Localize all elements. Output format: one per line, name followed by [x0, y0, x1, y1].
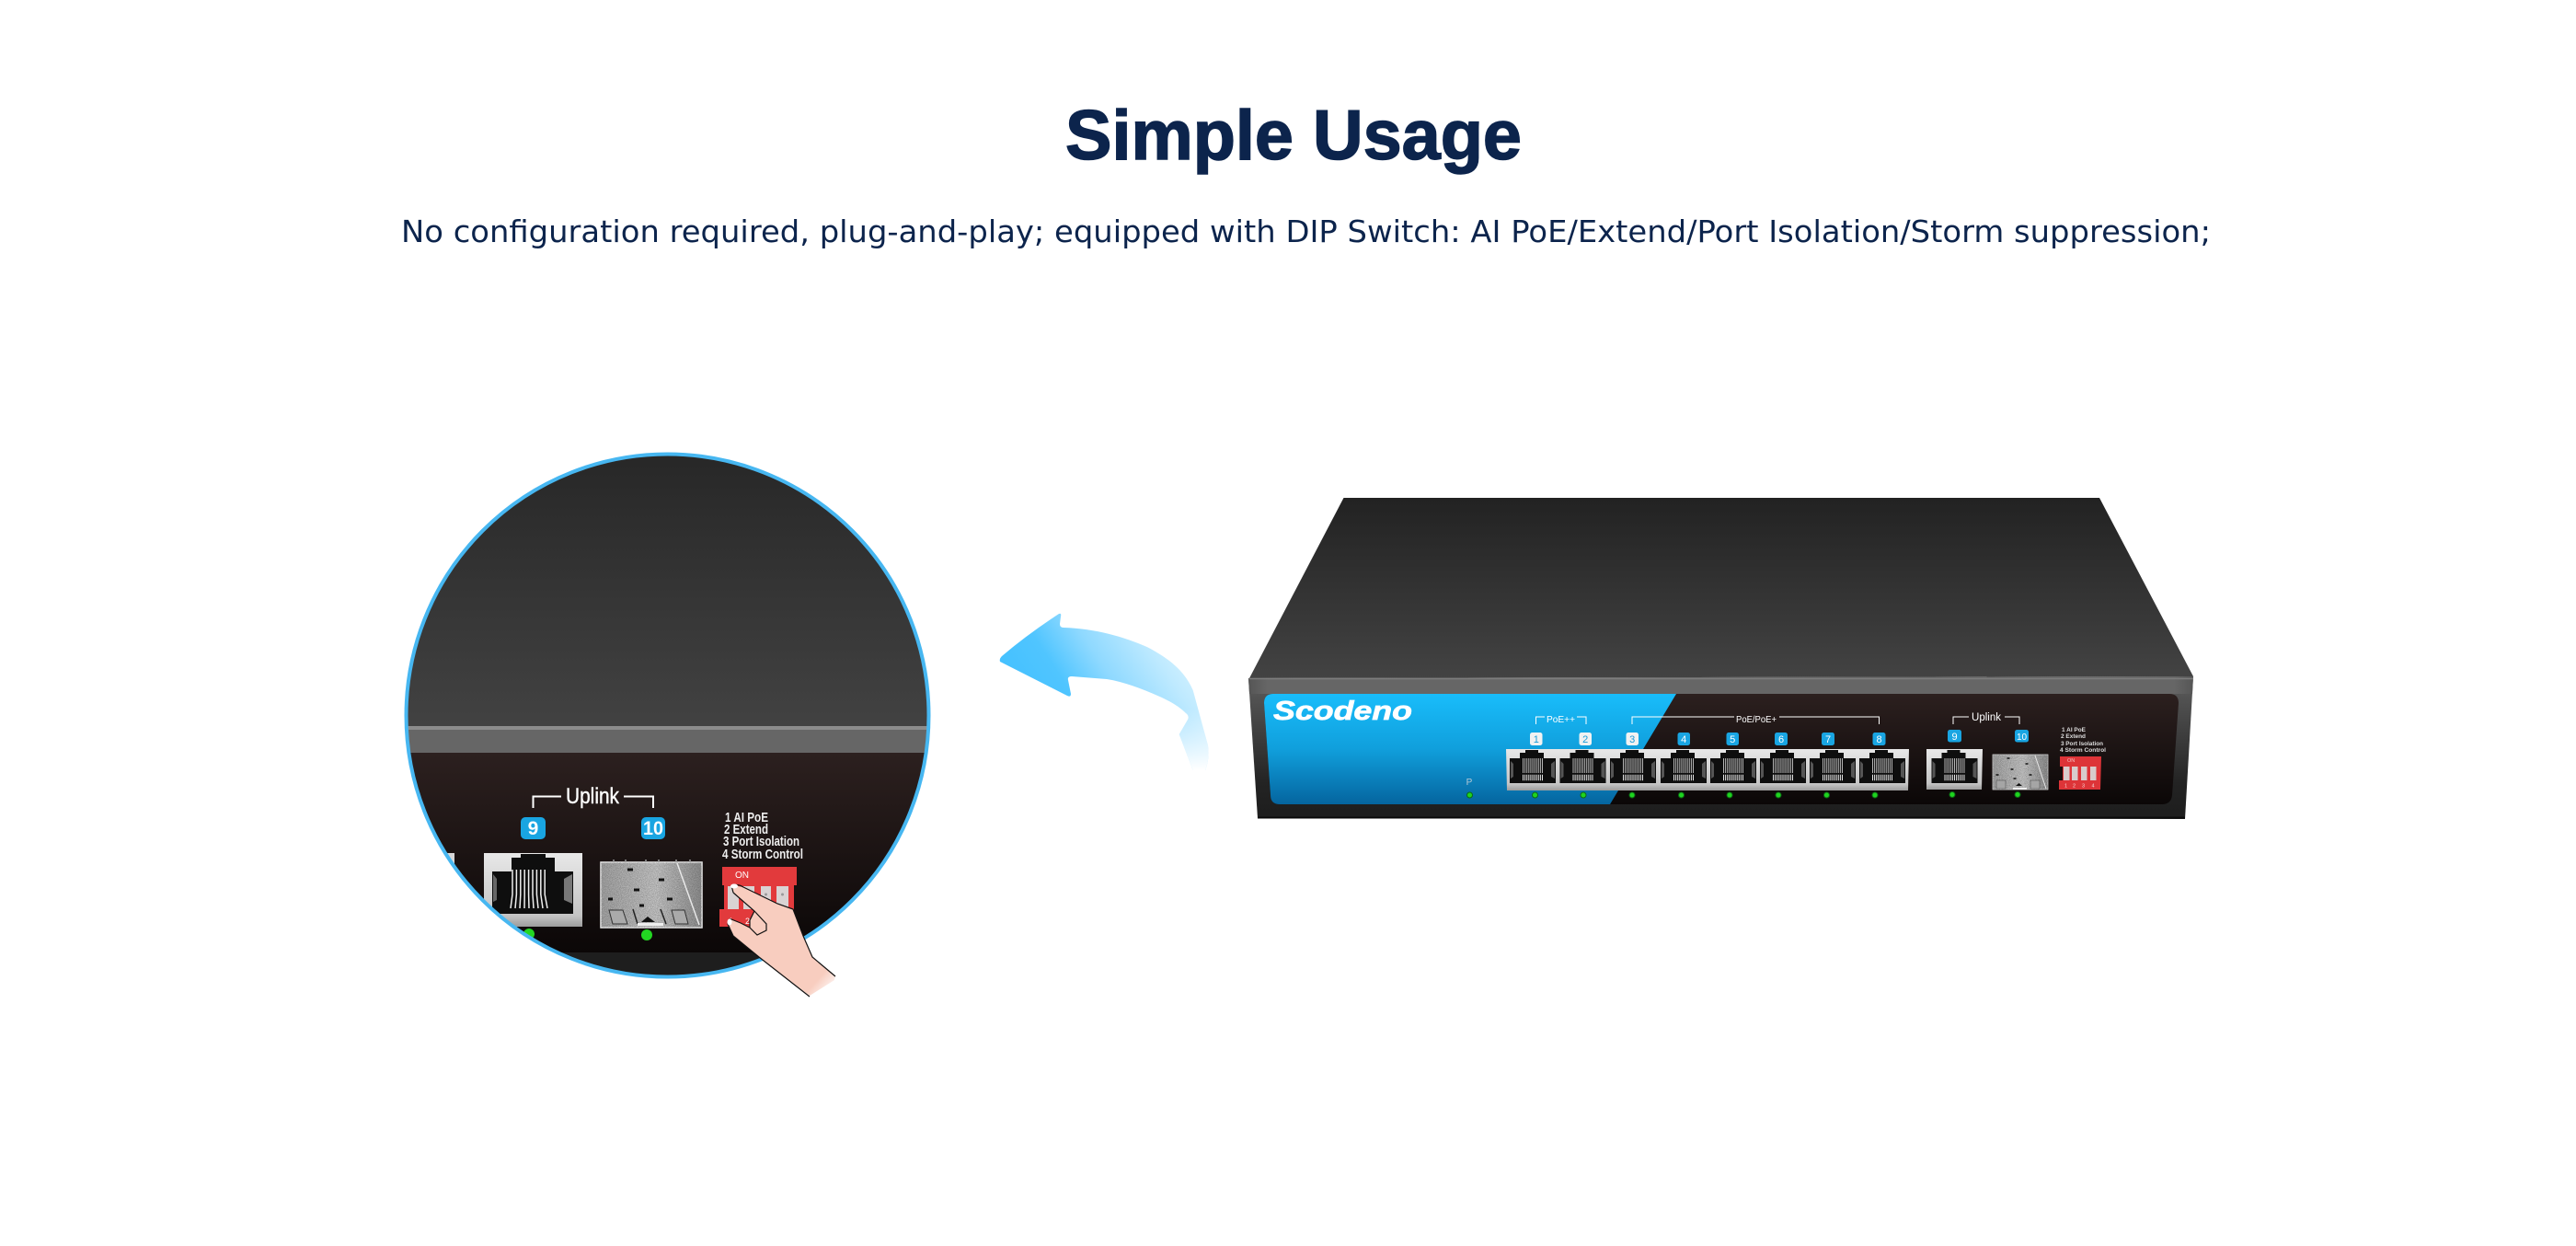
top cover: [1249, 498, 2193, 678]
port number badges: 5: [1730, 734, 1735, 745]
RJ45 port 9: [484, 853, 582, 927]
DIP legend: 1 AI PoE: [2062, 727, 2087, 733]
DIP switch: 3: [2082, 784, 2085, 790]
DIP switch: ON: [735, 871, 749, 881]
port number badges: 7: [1825, 734, 1831, 745]
circle outline: [407, 455, 929, 977]
subtitle: No configuration required, plug-and-play; equipped with DIP Switch: AI PoE/Extend/Port Isolation/Storm suppression;: [401, 213, 2211, 249]
RJ45 uplink port 9: [1926, 749, 1983, 790]
DIP legend: 3 Port Isolation: [2061, 741, 2103, 747]
DIP legend: 4 Storm Control: [2060, 747, 2106, 754]
P label: P: [1466, 778, 1473, 788]
Uplink bracket: Uplink: [1972, 712, 2001, 723]
RJ45 port strip 1-8: [1506, 749, 1909, 790]
title: Simple Usage: [1065, 97, 1522, 175]
PoE switch device: [1248, 498, 2193, 819]
LED 10: [641, 929, 652, 940]
circle contents: [408, 456, 927, 975]
SFP port 10: [1993, 755, 2048, 790]
port number badges: 6: [1778, 734, 1784, 745]
DIP legend: [2060, 727, 2106, 754]
DIP legend: 3 Port Isolation: [723, 835, 799, 849]
DIP legend: 2 Extend: [724, 823, 768, 837]
hand pressing switch: [727, 883, 835, 997]
port number badges: [1530, 730, 2029, 745]
PoE/PoE+ bracket: [1632, 714, 1879, 725]
DIP legend: [722, 813, 802, 859]
uplink bracket: [532, 787, 654, 808]
DIP switch: 2: [2073, 784, 2076, 790]
logo: Scodeno: [1273, 697, 1412, 726]
PoE++ bracket: [1536, 714, 1586, 725]
magnified circle: DIP switch detail: [396, 442, 948, 997]
DIP legend: 1 AI PoE: [725, 811, 768, 825]
port number badges: 9: [1951, 732, 1958, 743]
DIP switch: 1: [729, 917, 733, 926]
front panel dark: [1264, 694, 2179, 804]
port number badges: 3: [1629, 734, 1635, 745]
DIP legend: 2 Extend: [2061, 733, 2086, 740]
port number badges: 2: [1582, 734, 1588, 745]
bottom edge: [1258, 817, 2185, 819]
port number badges: 8: [1876, 734, 1882, 745]
DIP switch: 4: [2092, 784, 2095, 790]
LED 9: [524, 929, 535, 938]
badge 9: 9: [528, 818, 538, 839]
DIP switch: [2059, 756, 2101, 790]
DIP switch: 1: [2064, 784, 2067, 790]
port number badges: 10: [2017, 733, 2027, 743]
front top band: [1248, 676, 2193, 694]
PoE/PoE+ bracket: PoE/PoE+: [1736, 714, 1777, 725]
SFP port 10: [601, 860, 702, 928]
Uplink bracket: [1953, 712, 2019, 724]
DIP legend: 4 Storm Control: [722, 848, 803, 862]
front casing: [1248, 676, 2193, 819]
DIP switch: [719, 867, 797, 927]
port number badges: 4: [1681, 734, 1686, 745]
curved arrow: [1000, 614, 1209, 770]
uplink bracket: Uplink: [566, 784, 620, 809]
neighbouring port edge: [447, 853, 454, 863]
badge 10: 10: [643, 818, 663, 839]
DIP switch: ON: [2067, 758, 2075, 764]
front panel blue area: [1264, 694, 1676, 804]
status LEDs: [1466, 791, 2020, 798]
badge 9: [521, 817, 546, 839]
DIP switch: 2: [745, 917, 750, 926]
PoE++ bracket: PoE++: [1547, 714, 1575, 725]
port number badges: 1: [1534, 734, 1539, 745]
